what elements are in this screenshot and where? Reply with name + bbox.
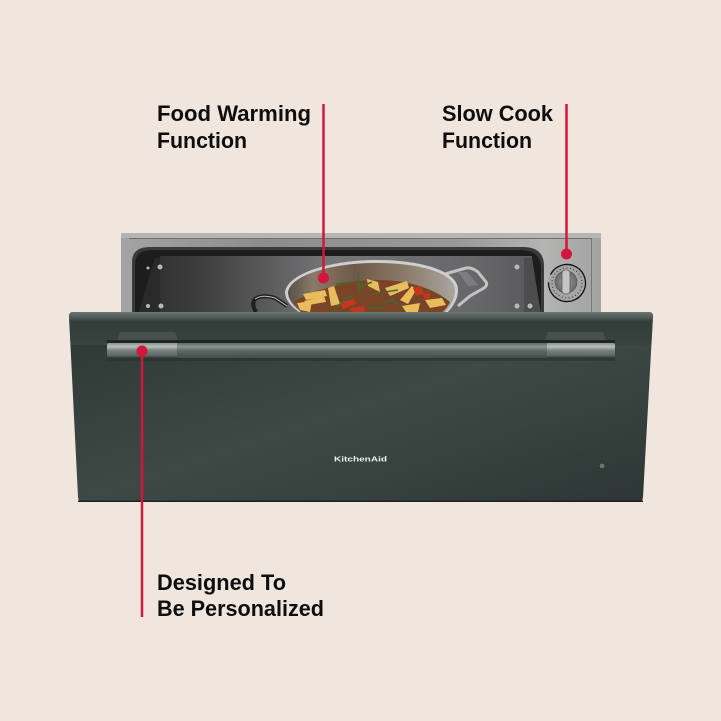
pointer dot	[136, 346, 148, 356]
heading: Designed To	[157, 570, 286, 595]
callout: designed to be personalized	[136, 346, 324, 621]
drawer front panel	[69, 312, 653, 502]
wall oven warming drawer	[69, 233, 653, 502]
heading: Be Personalized	[157, 596, 324, 621]
drawer cavity	[132, 247, 544, 314]
pointer dot	[561, 248, 572, 260]
brand logo: KitchenAid	[334, 456, 387, 464]
pasta and herbs	[294, 272, 450, 314]
door handle	[107, 343, 615, 361]
pot of pasta	[253, 260, 487, 314]
pot body	[285, 260, 458, 314]
heading: Food Warming	[157, 101, 311, 126]
pointer line	[565, 104, 568, 254]
heading: Function	[442, 128, 532, 153]
callout: slow cook function	[442, 101, 572, 260]
indicator light	[599, 463, 605, 469]
callout: food warming function	[157, 101, 329, 284]
stainless steel frame	[121, 233, 601, 317]
control dial	[542, 258, 592, 308]
pot handles	[253, 296, 287, 312]
pointer dot	[318, 272, 329, 284]
heading: Function	[157, 128, 247, 153]
pointer line	[141, 351, 143, 617]
pointer line	[322, 104, 325, 278]
heading: Slow Cook	[442, 101, 554, 126]
handle recesses	[117, 332, 178, 341]
